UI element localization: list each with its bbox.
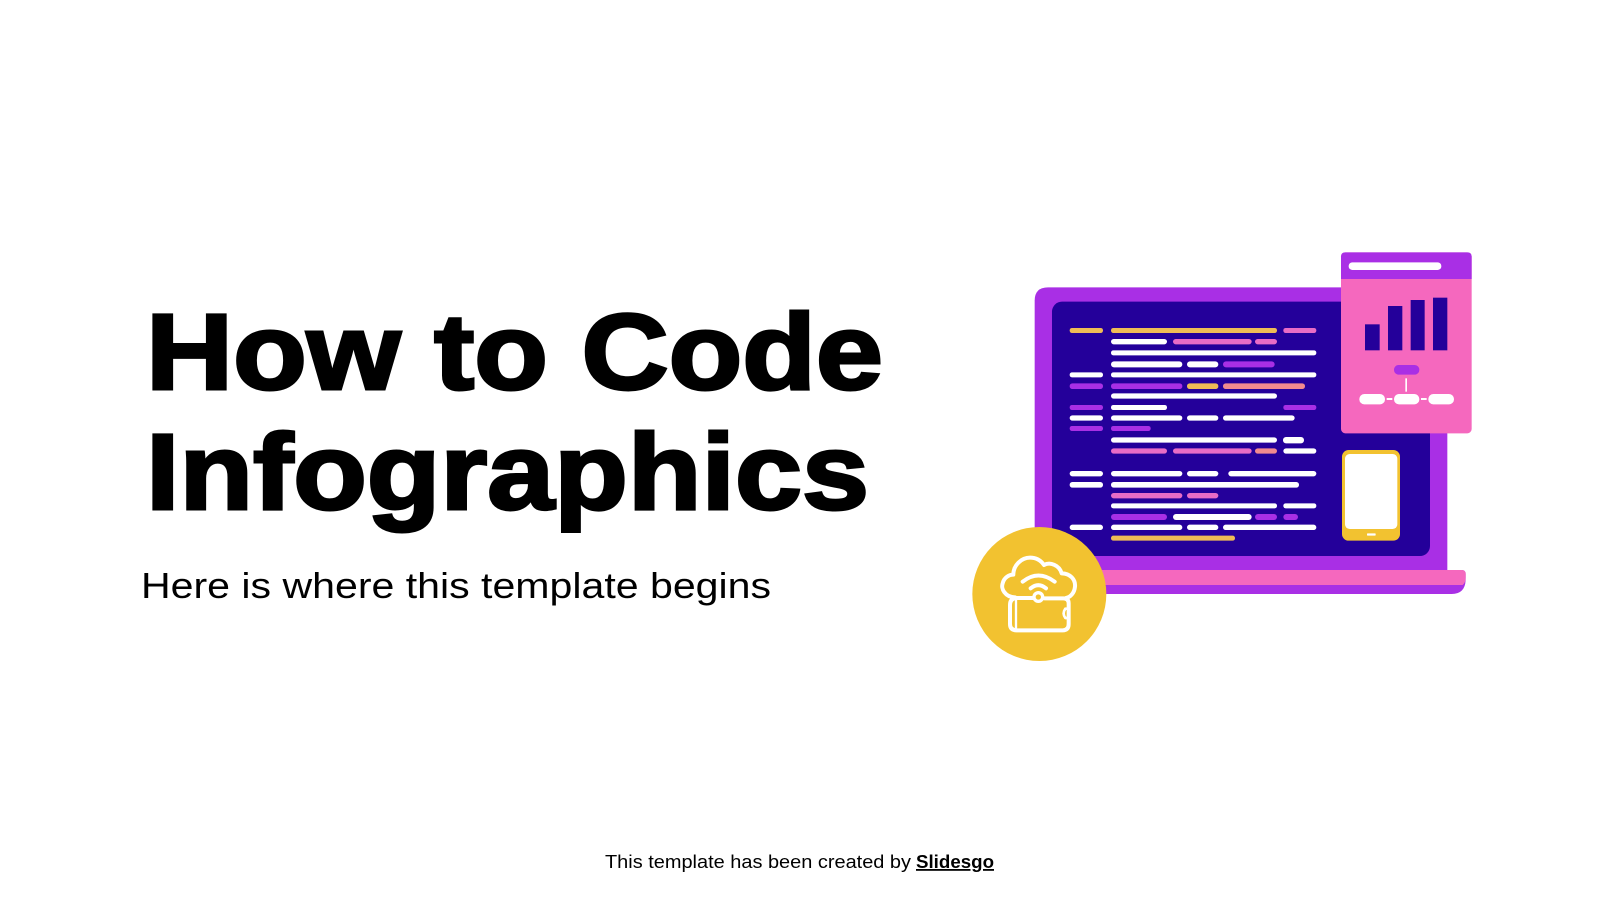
phone xyxy=(1342,450,1400,541)
panel header xyxy=(1341,252,1472,279)
title xyxy=(146,291,883,532)
subtitle: Here is where this template begins xyxy=(141,565,771,606)
title: How to Code xyxy=(146,291,883,412)
laptop screen xyxy=(1052,302,1430,556)
title: Infographics xyxy=(146,411,869,532)
flow diagram xyxy=(1359,365,1454,404)
illustration: laptop with code xyxy=(972,252,1472,661)
icon: cloud wallet wifi badge xyxy=(972,527,1106,661)
footer credit: Slidesgo xyxy=(916,852,994,872)
dashboard panel xyxy=(1341,252,1472,433)
code lines xyxy=(1070,328,1316,541)
footer credit: This template has been created by xyxy=(605,852,911,872)
bar chart xyxy=(1365,298,1447,350)
laptop base xyxy=(1070,570,1466,594)
laptop lid xyxy=(1035,287,1447,570)
